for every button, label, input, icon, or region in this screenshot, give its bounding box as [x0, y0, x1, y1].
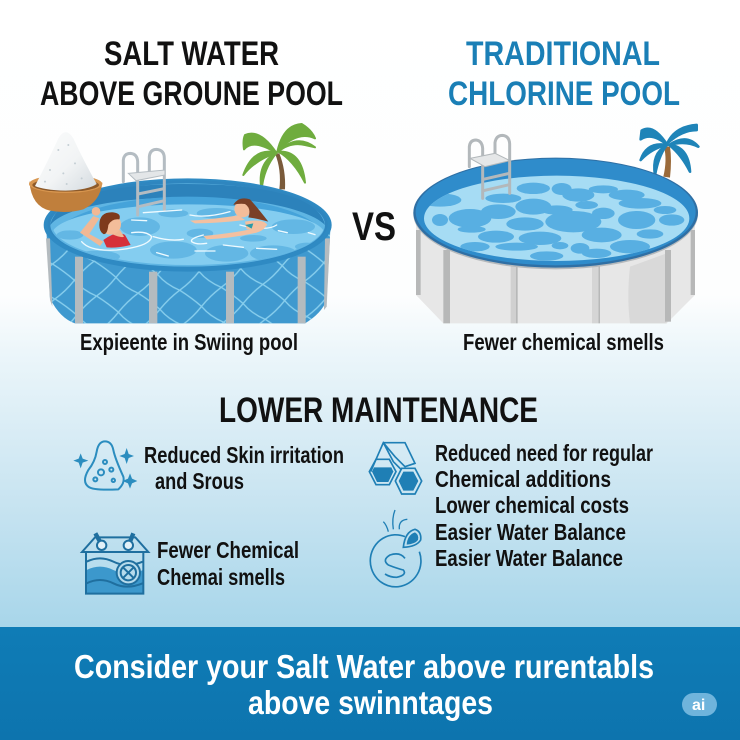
- ai badge: [682, 693, 717, 716]
- swimmer with long hair: [190, 198, 268, 239]
- text: reduced skin irritation: and Srous: [155, 468, 244, 494]
- title: salt water pool: [40, 35, 343, 113]
- icon: salt bag with S: [370, 510, 421, 587]
- pool rim: [413, 159, 698, 269]
- title: salt water pool: ABOVE GROUNE POOL: [40, 75, 343, 113]
- icon: salt drop with sparkles: [73, 441, 137, 490]
- water ripples: [82, 210, 315, 256]
- pool wall posts: [416, 230, 695, 323]
- text: fewer chemical: Chemai smells: [157, 564, 285, 590]
- title: traditional chlorine pool: [448, 35, 680, 113]
- text: chemical benefits list: Easier Water Balance: [435, 545, 623, 571]
- pool ladder: [123, 149, 165, 215]
- footer text: [74, 648, 654, 721]
- chlorine pool illustration: [413, 125, 698, 323]
- pool wall panels: [416, 220, 695, 323]
- icon: blue palm tree: [641, 125, 698, 178]
- pool water: [419, 173, 693, 263]
- text: chemical benefits list: Lower chemical costs: [435, 492, 629, 518]
- pool wall with lattice pattern: [46, 223, 331, 323]
- text: fewer chemical: [157, 537, 299, 590]
- text: chemical benefits list: Chemical additions: [435, 466, 611, 492]
- caption: chlorine pool: Fewer chemical smells: [463, 329, 664, 355]
- heading: lower maintenance: LOWER MAINTENANCE: [219, 391, 538, 430]
- pool ladder: [469, 135, 510, 198]
- icon: bowl of salt: [29, 132, 102, 212]
- title: salt water pool: SALT WATER: [104, 35, 279, 73]
- icon: hexagon molecules: [369, 443, 422, 494]
- title: traditional chlorine pool: TRADITIONAL: [466, 35, 660, 73]
- text: reduced skin irritation: [144, 442, 344, 494]
- footer banner: [0, 627, 740, 740]
- footer text: above swinntages: [248, 684, 493, 721]
- footer text: Consider your Salt Water above rurentabls: [74, 648, 654, 685]
- swimmer in red: [80, 207, 131, 248]
- salt water pool illustration: [29, 124, 332, 323]
- text: chemical benefits list: Reduced need for regular: [435, 440, 653, 466]
- icon: pool tank: [82, 533, 148, 594]
- ai badge: ai: [692, 697, 705, 714]
- text: reduced skin irritation: Reduced Skin irritation: [144, 442, 344, 468]
- text: chemical benefits list: [435, 440, 653, 571]
- pool rim and inner wall: [44, 178, 332, 272]
- icon: green palm tree: [243, 124, 315, 190]
- pool frame posts: [46, 238, 330, 323]
- text: chemical benefits list: Easier Water Balance: [435, 519, 626, 545]
- pool water: [52, 204, 325, 266]
- vs label: VS: [352, 205, 396, 249]
- caption: salt pool: Expieente in Swiing pool: [80, 329, 298, 355]
- title: traditional chlorine pool: CHLORINE POOL: [448, 75, 680, 113]
- text: fewer chemical: Fewer Chemical: [157, 537, 299, 563]
